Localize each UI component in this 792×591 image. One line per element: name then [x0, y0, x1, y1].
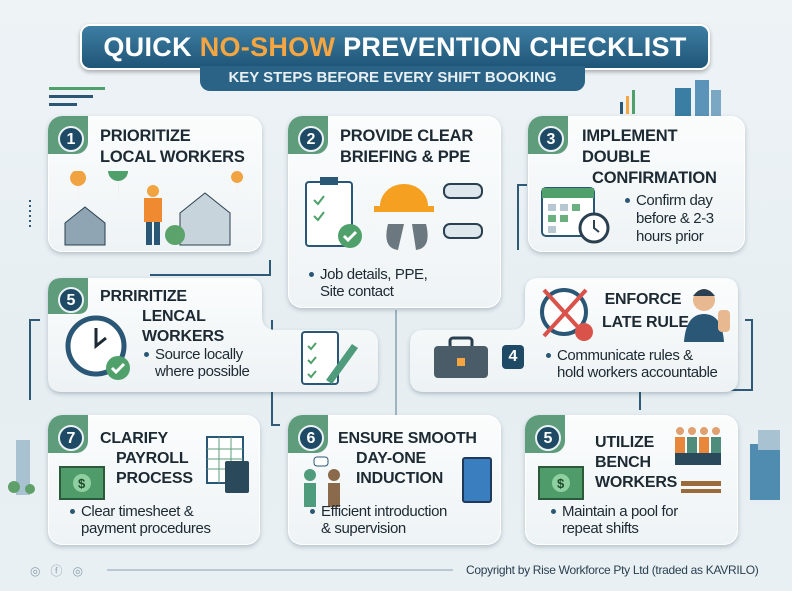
card 2 — [288, 116, 501, 308]
card 4 (right middle): ENFORCE — [605, 291, 681, 308]
card 3: 3 — [547, 131, 555, 148]
icon: money — [538, 466, 584, 500]
icon: chart top-right — [620, 80, 721, 116]
footer icons: ◎ⓕ◎ — [30, 564, 93, 578]
card 3 — [528, 116, 745, 252]
copyright: Copyright by Rise Workforce Pty Ltd (traded as KAVRILO) — [466, 563, 759, 577]
card 3: CONFIRMATION — [592, 169, 717, 187]
card 5 (left middle): WORKERS — [142, 328, 224, 345]
subtitle banner: KEY STEPS BEFORE EVERY SHIFT BOOKING — [228, 69, 557, 86]
title banner — [80, 24, 710, 70]
card 2: BRIEFING & PPE — [340, 148, 470, 166]
card 3: DOUBLE — [582, 148, 650, 166]
card 6 — [288, 415, 501, 545]
card 5 (left middle): PRRIRITIZE — [100, 288, 187, 305]
icon: houses and worker — [64, 171, 243, 246]
card 5 (bottom right): Maintain a pool for — [562, 503, 678, 520]
card 7: PAYROLL — [116, 450, 188, 467]
icon: calendar with clock — [541, 187, 610, 244]
title banner: QUICK NO-SHOW PREVENTION CHECKLIST — [103, 32, 687, 62]
icon: money: $ — [557, 476, 565, 491]
card 5 (left middle): 5 — [67, 292, 75, 309]
icon: spreadsheet calculator — [206, 436, 249, 493]
card 5 (left middle): where possible — [155, 363, 249, 380]
icon: money: $ — [78, 476, 86, 491]
card 6: 6 — [307, 430, 315, 447]
icon: checklist with pencil — [301, 331, 358, 385]
card 1: PRIORITIZE — [100, 127, 191, 145]
card 3: IMPLEMENT — [582, 127, 677, 145]
card 5 (left middle) — [58, 287, 358, 385]
card 6: ENSURE SMOOTH — [338, 430, 477, 447]
icon: two people talking — [304, 456, 340, 507]
card 1: LOCAL WORKERS — [100, 148, 245, 166]
card 4 (right middle) — [434, 288, 730, 381]
card 5 (bottom right): UTILIZE — [595, 434, 654, 451]
card 7: payment procedures — [81, 520, 211, 537]
subtitle banner — [200, 66, 585, 91]
card 5 (bottom right): 5 — [544, 430, 552, 447]
card 5 (bottom right) — [525, 415, 738, 545]
card 1: 1 — [67, 131, 75, 148]
decoration: city right — [750, 430, 780, 500]
card 5 (bottom right): repeat shifts — [562, 520, 639, 537]
card 4 (right middle): LATE RULE — [602, 314, 689, 331]
card 5 (left middle): Source locally — [155, 346, 243, 363]
card 5 (bottom right): BENCH — [595, 454, 651, 471]
card 6: DAY-ONE — [356, 450, 426, 467]
card 3: Confirm day — [636, 192, 712, 209]
decoration: city left — [8, 440, 35, 495]
icon: crossed clock — [540, 288, 593, 341]
card 1 — [48, 116, 262, 252]
card 4 (right middle): 4 — [509, 348, 517, 365]
card 3: hours prior — [636, 228, 703, 245]
icon: manager — [684, 289, 730, 342]
card 5 (bottom right): WORKERS — [595, 474, 677, 491]
card 7: CLARIFY — [100, 430, 168, 447]
icon: briefcase — [434, 336, 488, 378]
icon: clipboard, helmet, gloves, goggles — [305, 177, 483, 250]
card 7 — [48, 415, 260, 545]
card 6: & supervision — [321, 520, 406, 537]
icon: clock with check — [66, 316, 130, 380]
card 4 (right middle): hold workers accountable — [557, 364, 718, 381]
card 6: INDUCTION — [356, 470, 443, 487]
card 2: Job details, PPE, — [320, 266, 427, 283]
card 3: before & 2-3 — [636, 210, 714, 227]
card 7: Clear timesheet & — [81, 503, 193, 520]
card 6: Efficient introduction — [321, 503, 447, 520]
icon: book — [462, 457, 492, 503]
card 7: 7 — [67, 430, 75, 447]
card 2: 2 — [307, 131, 315, 148]
card 7: PROCESS — [116, 470, 193, 487]
card 5 (left middle): LENCAL — [142, 308, 206, 325]
icon: money — [59, 466, 105, 500]
card 2: Site contact — [320, 283, 394, 300]
card 4 (right middle): Communicate rules & — [557, 347, 693, 364]
card 2: PROVIDE CLEAR — [340, 127, 473, 145]
decoration: bars top-left — [49, 87, 105, 106]
icon: workers group and bench — [675, 427, 721, 493]
